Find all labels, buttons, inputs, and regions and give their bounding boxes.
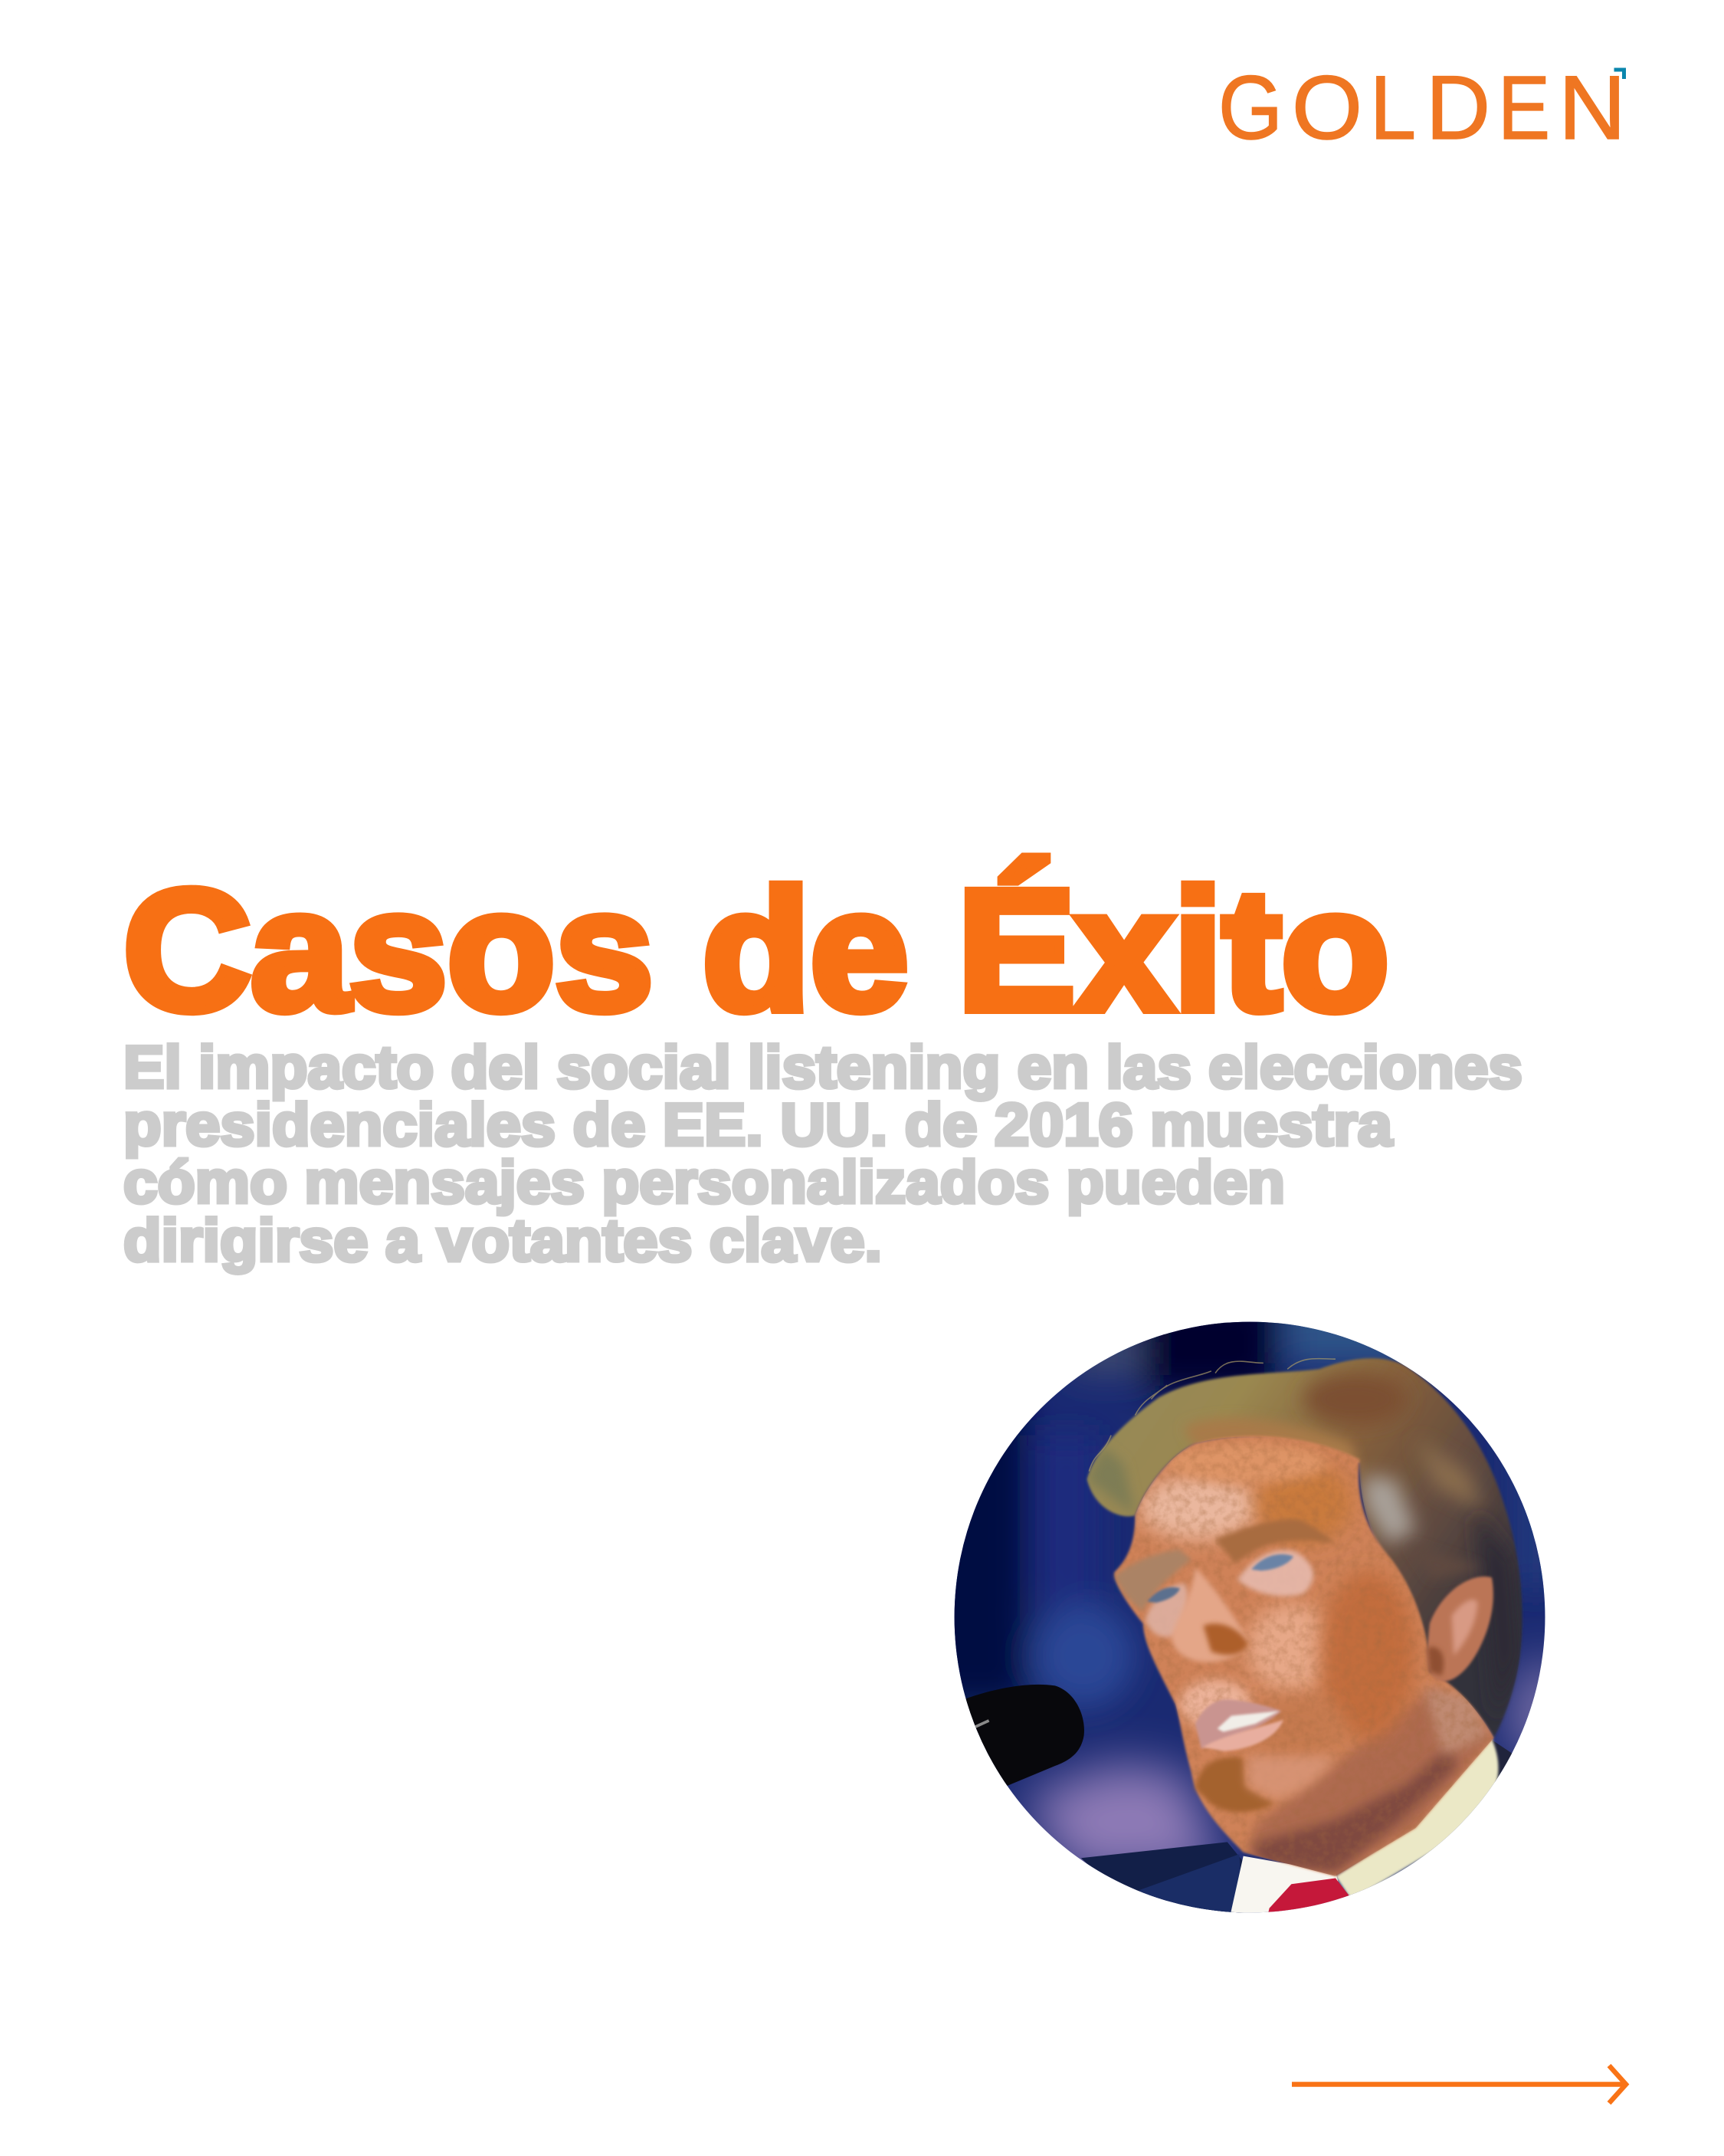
logo: GOLDEN: E (1498, 57, 1550, 159)
tie (1268, 1878, 1349, 1912)
skin: face and neck (1111, 1423, 1512, 1884)
shirt (1231, 1856, 1342, 1913)
collar (1336, 1734, 1498, 1900)
jacket (1081, 1842, 1245, 1916)
ear (1427, 1577, 1493, 1682)
mouth (1195, 1699, 1283, 1751)
subtitle text block: dirigirse a votantes clave. (123, 1206, 882, 1274)
eye sockets (1146, 1583, 1188, 1637)
hair (1087, 1358, 1522, 1738)
photo: speaker at a microphone, circular crop (955, 1321, 1545, 1913)
chin shadow (1195, 1757, 1276, 1812)
arrow (1292, 2066, 1626, 2103)
logo: GOLDEN: D (1426, 57, 1490, 159)
subtitle text block: presidenciales de EE. UU. de 2016 muestra (123, 1091, 1393, 1158)
eyes (1147, 1587, 1180, 1603)
skin texture (1133, 1436, 1493, 1859)
logo: GOLDEN: L (1370, 57, 1416, 159)
nose (1172, 1567, 1248, 1662)
subtitle text block (123, 1033, 1522, 1274)
subtitle text block: El impacto del social listening en las elecciones (123, 1033, 1522, 1101)
photo background (955, 1321, 1545, 1913)
eyebrows (1115, 1550, 1191, 1612)
jacket right (1492, 1740, 1513, 1783)
title: Casos de Éxito (123, 855, 1389, 1046)
logo: GOLDEN (1218, 57, 1626, 159)
forehead (1139, 1475, 1260, 1540)
microphone (963, 1685, 1084, 1786)
subtitle text block: cómo mensajes personalizados pueden (123, 1148, 1285, 1216)
logo: GOLDEN: G (1218, 57, 1283, 159)
logo: GOLDEN: O (1292, 57, 1362, 159)
neck tone (1247, 1688, 1496, 1876)
logo: GOLDEN: N (1558, 57, 1626, 159)
cheeks (1247, 1603, 1336, 1692)
